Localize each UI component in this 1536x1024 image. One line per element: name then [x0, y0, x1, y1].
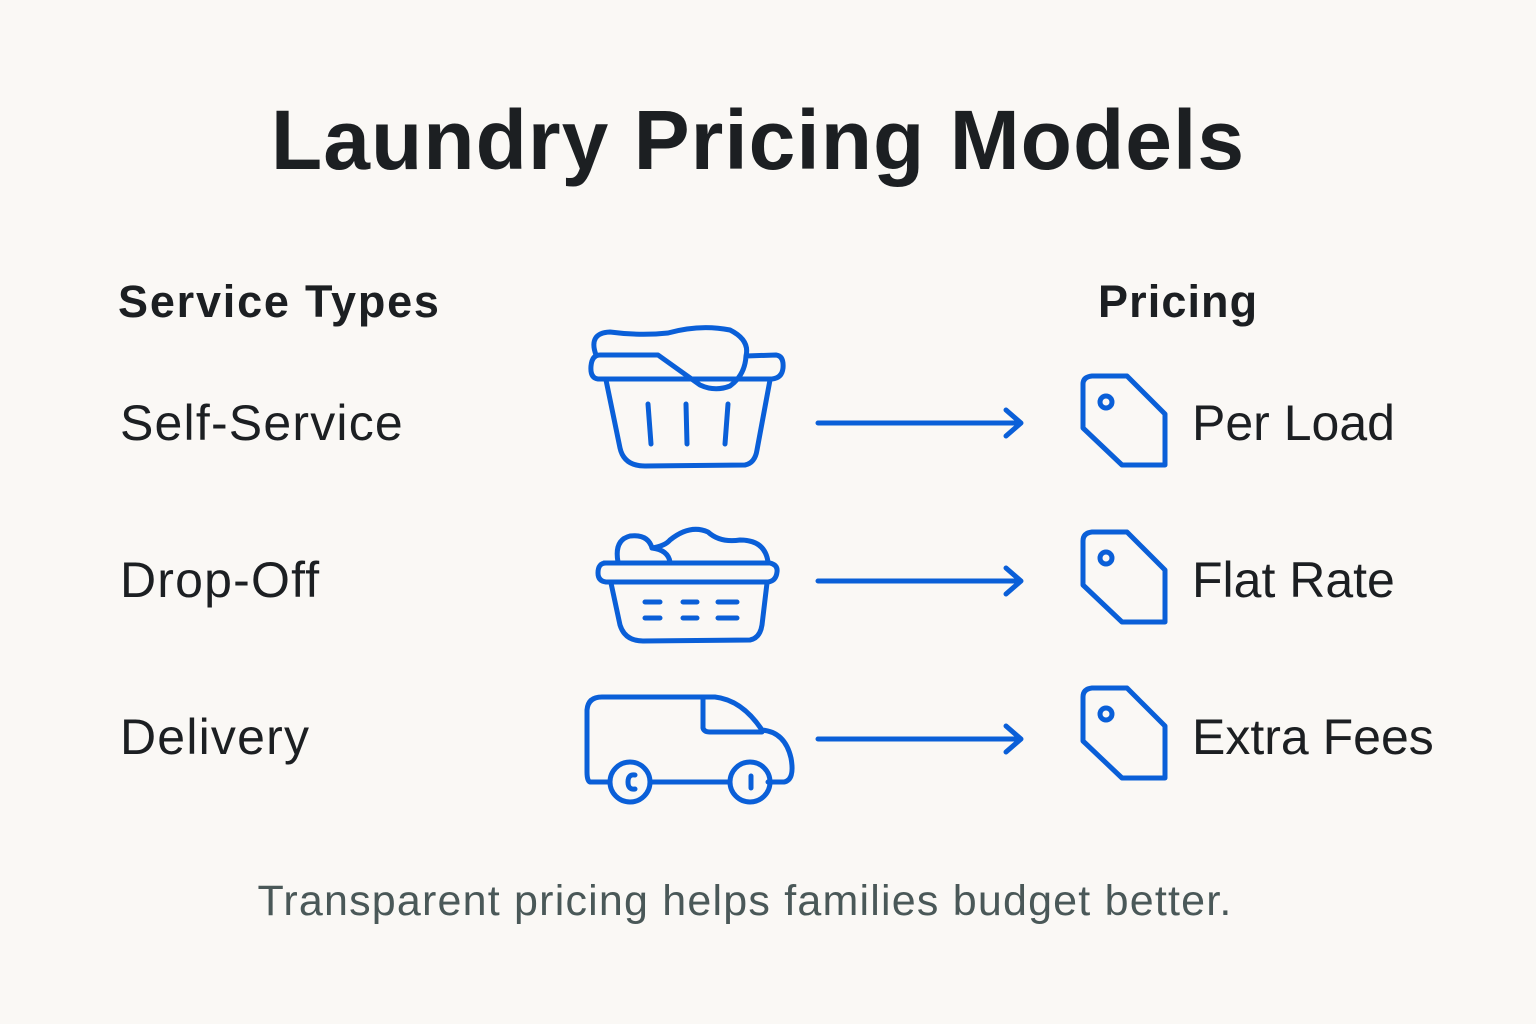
label: flat rate: Flat Rate	[1192, 552, 1395, 608]
arrow 3	[818, 726, 1021, 752]
title: Laundry Pricing Models	[271, 93, 1245, 187]
icon: tag 1	[1083, 376, 1165, 465]
heading: service types: Service Types	[118, 276, 441, 327]
label: extra fees: Extra Fees	[1192, 709, 1434, 765]
arrow 1	[818, 410, 1021, 436]
footer text: Transparent pricing helps families budget better.	[257, 877, 1233, 925]
label: self-service: Self-Service	[120, 395, 404, 451]
label: delivery: Delivery	[120, 709, 310, 765]
label: drop-off: Drop-Off	[120, 552, 320, 608]
icon: laundry basket 2	[598, 529, 777, 641]
icon: tag 2	[1083, 532, 1165, 622]
icon: tag 3	[1083, 688, 1165, 778]
arrow 2	[818, 568, 1021, 594]
icon: laundry basket 1	[591, 328, 783, 466]
label: per load: Per Load	[1192, 395, 1395, 451]
icon: delivery van	[587, 697, 792, 802]
heading: pricing: Pricing	[1098, 276, 1258, 327]
